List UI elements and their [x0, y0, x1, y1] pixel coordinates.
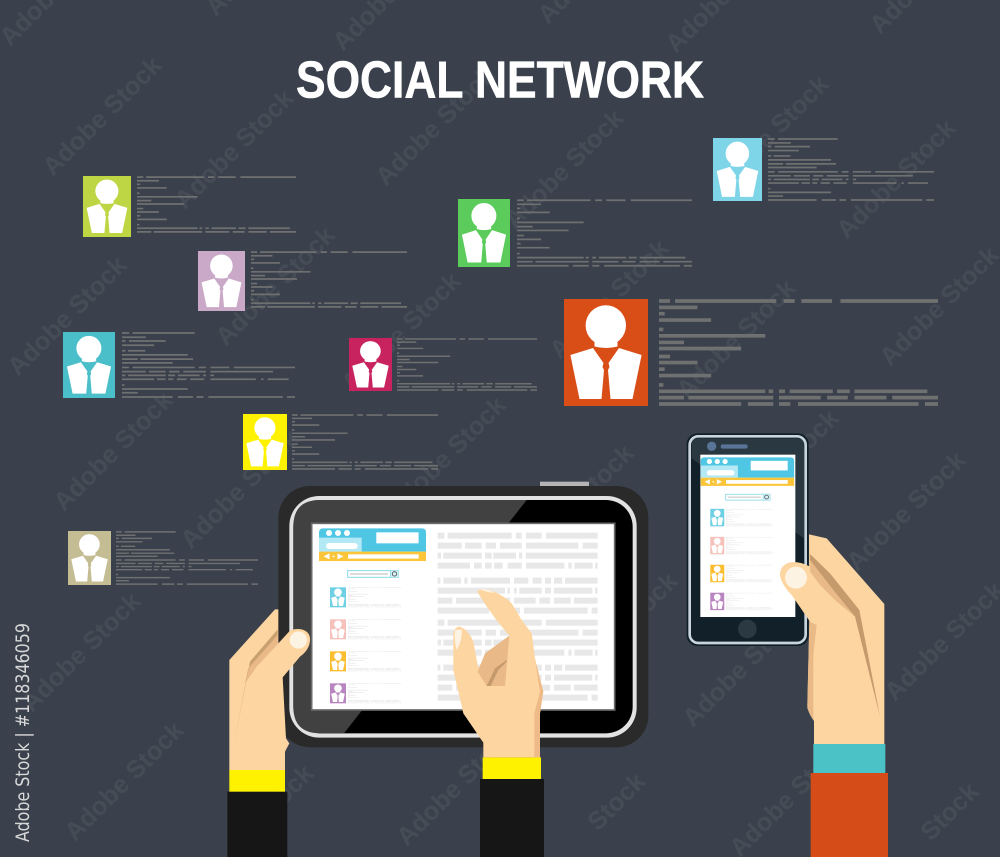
watermark pattern: Adobe Stock: [671, 274, 802, 404]
watermark pattern: Adobe Stock: [499, 104, 630, 234]
tablet screen app: [319, 528, 426, 703]
profile card: yellow: [243, 414, 438, 470]
tablet device: [278, 482, 648, 747]
watermark pattern: Adobe Stock: [677, 602, 808, 732]
watermark pattern: Adobe Stock: [59, 716, 190, 846]
watermark pattern: Adobe Stock: [229, 569, 360, 699]
watermark pattern: Adobe Stock: [2, 251, 133, 381]
smartphone device: [687, 433, 809, 646]
profile card: teal: [63, 332, 295, 398]
profile card: cyan: [713, 138, 934, 201]
profile card: lime: [83, 176, 296, 237]
watermark pattern: Adobe Stock: [714, 404, 845, 534]
watermark pattern: Adobe Stock: [544, 234, 675, 364]
watermark pattern: Adobe Stock: [349, 594, 480, 724]
phone screen app: [701, 457, 794, 610]
phone home button: [738, 620, 757, 638]
vertical stock credit: Adobe Stock | #118346059: [12, 623, 34, 842]
phone camera and speaker: [707, 442, 748, 451]
profile card: mauve: [198, 251, 407, 311]
watermark pattern: Adobe Stock: [553, 567, 684, 697]
watermark pattern: Adobe Stock: [381, 391, 512, 521]
watermark pattern: Adobe Stock: [336, 267, 467, 397]
profile card: crimson: [349, 338, 537, 391]
title: SOCIAL NETWORK: [296, 52, 704, 110]
watermark pattern: Adobe Stock: [16, 587, 147, 717]
tablet article text: [438, 536, 598, 698]
watermark pattern: Adobe Stock: [370, 61, 501, 191]
profile card: green: [458, 199, 692, 267]
watermark pattern: Adobe Stock: [37, 51, 168, 181]
watermark pattern: Stock: [250, 759, 320, 828]
right hand holding phone: [780, 534, 888, 857]
watermark pattern: Adobe Stock: [831, 114, 962, 244]
watermark pattern: Adobe Stock: [841, 446, 972, 576]
watermark pattern: Adobe Stock: [175, 424, 306, 554]
watermark pattern: Adobe Stock: [210, 221, 341, 351]
watermark pattern: Adobe Stock: [48, 386, 179, 516]
watermark pattern: Stock: [915, 777, 985, 846]
profile card: khaki: [68, 531, 258, 585]
watermark pattern: Adobe Stock: [704, 70, 835, 200]
watermark pattern: Adobe Stock: [509, 439, 640, 569]
left hand holding tablet: [227, 609, 310, 857]
watermark pattern: Adobe Stock: [169, 84, 300, 214]
center hand touching screen: [453, 589, 544, 857]
watermark pattern: Stock: [582, 767, 652, 836]
watermark pattern: Adobe Stock: [391, 721, 522, 851]
profile card: orange: [564, 299, 938, 406]
